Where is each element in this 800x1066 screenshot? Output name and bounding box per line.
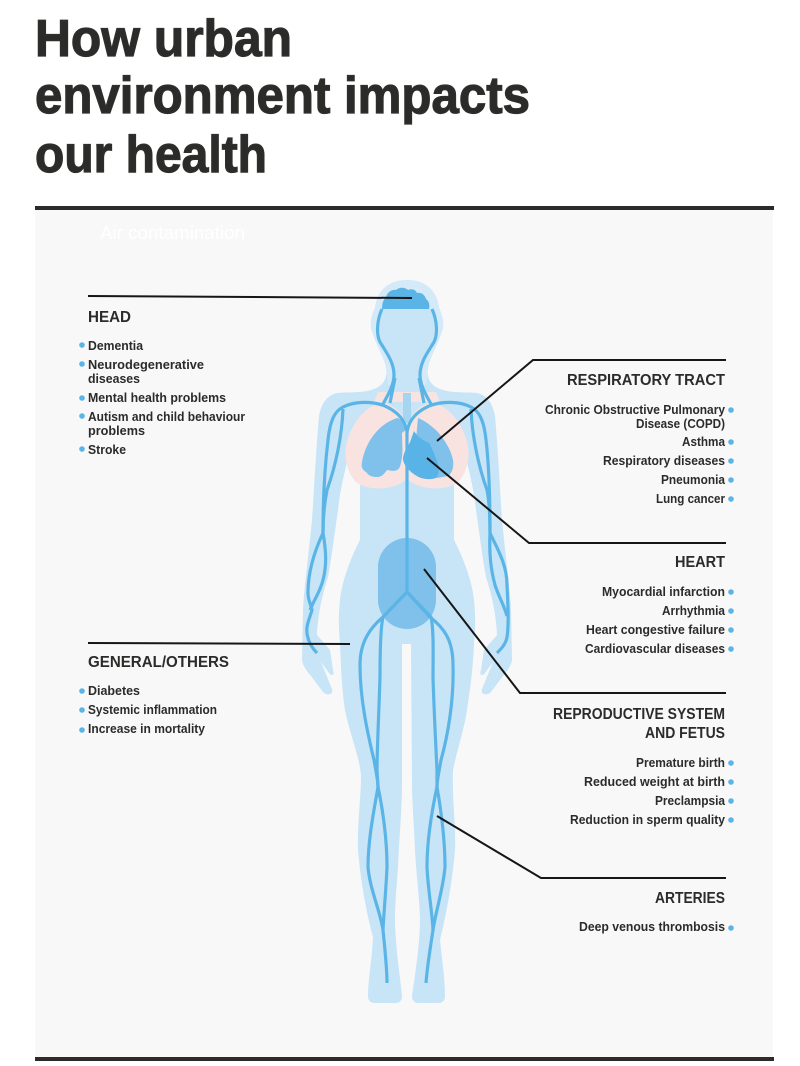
lungs outline: pink (345, 403, 407, 488)
panel: respiratory tract: Chronic Obstructive Pulmonary (545, 403, 725, 417)
panel: respiratory tract: RESPIRATORY TRACT (567, 372, 725, 389)
panel: respiratory tract: Disease (COPD) (636, 417, 725, 431)
body silhouette (302, 280, 512, 1003)
panel: reproductive system and fetus: REPRODUCTIVE SYSTEM (553, 706, 725, 723)
pelvis (378, 538, 436, 629)
title: environment impacts (35, 67, 530, 125)
panel: head: problems (88, 424, 145, 438)
panel: head: Dementia (88, 339, 144, 353)
title: our health (35, 126, 267, 184)
panel: heart: Heart congestive failure (586, 623, 725, 637)
panel: reproductive system and fetus: AND FETUS (645, 725, 725, 742)
panel: respiratory tract: Respiratory diseases (603, 454, 725, 468)
panel: heart: Myocardial infarction (602, 585, 725, 599)
panel: arteries (579, 890, 734, 934)
trachea (403, 393, 411, 423)
heart (403, 431, 439, 479)
panel: reproductive system and fetus: Premature birth (636, 756, 725, 770)
panel: general/others: Diabetes (88, 684, 140, 698)
panel: head: Mental health problems (88, 391, 226, 405)
veins (307, 309, 508, 983)
title (35, 10, 530, 184)
panel: reproductive system and fetus: Preclampsia (655, 794, 726, 808)
panel: respiratory tract (545, 372, 734, 506)
panel: general/others: GENERAL/OTHERS (88, 654, 229, 671)
panel: heart: Arrhythmia (662, 604, 726, 618)
panel: respiratory tract: Lung cancer (656, 492, 725, 506)
panel: head: Neurodegenerative (88, 358, 204, 372)
title: How urban (35, 10, 292, 68)
body figure (302, 280, 512, 1003)
panel: head: HEAD (88, 309, 131, 326)
panel: reproductive system and fetus: Reduction in sperm quality (570, 813, 725, 827)
panel: general/others: Increase in mortality (88, 722, 205, 736)
panel: head: diseases (88, 372, 140, 386)
panel: head: Stroke (88, 443, 126, 457)
faint white heading: Air contamination (100, 223, 245, 243)
panel: general/others (79, 654, 229, 736)
left lung (362, 418, 408, 477)
panel: respiratory tract: Pneumonia (661, 473, 726, 487)
panel: head: Autism and child behaviour (88, 410, 245, 424)
panel: heart: HEART (675, 554, 725, 571)
panel: general/others: Systemic inflammation (88, 703, 217, 717)
panel: heart (585, 554, 734, 656)
panel: reproductive system and fetus: Reduced weight at birth (584, 775, 725, 789)
brain (382, 288, 429, 309)
head halo (371, 280, 443, 385)
panel: arteries: ARTERIES (655, 890, 725, 907)
panel: reproductive system and fetus (553, 706, 734, 827)
leader lines (88, 296, 726, 878)
panel: respiratory tract: Asthma (682, 435, 726, 449)
panel: heart: Cardiovascular diseases (585, 642, 725, 656)
panel: arteries: Deep venous thrombosis (579, 920, 725, 934)
upper chest pink (374, 392, 440, 402)
right lung (414, 418, 453, 478)
panel: background (35, 209, 773, 1058)
panel: head (79, 309, 245, 457)
